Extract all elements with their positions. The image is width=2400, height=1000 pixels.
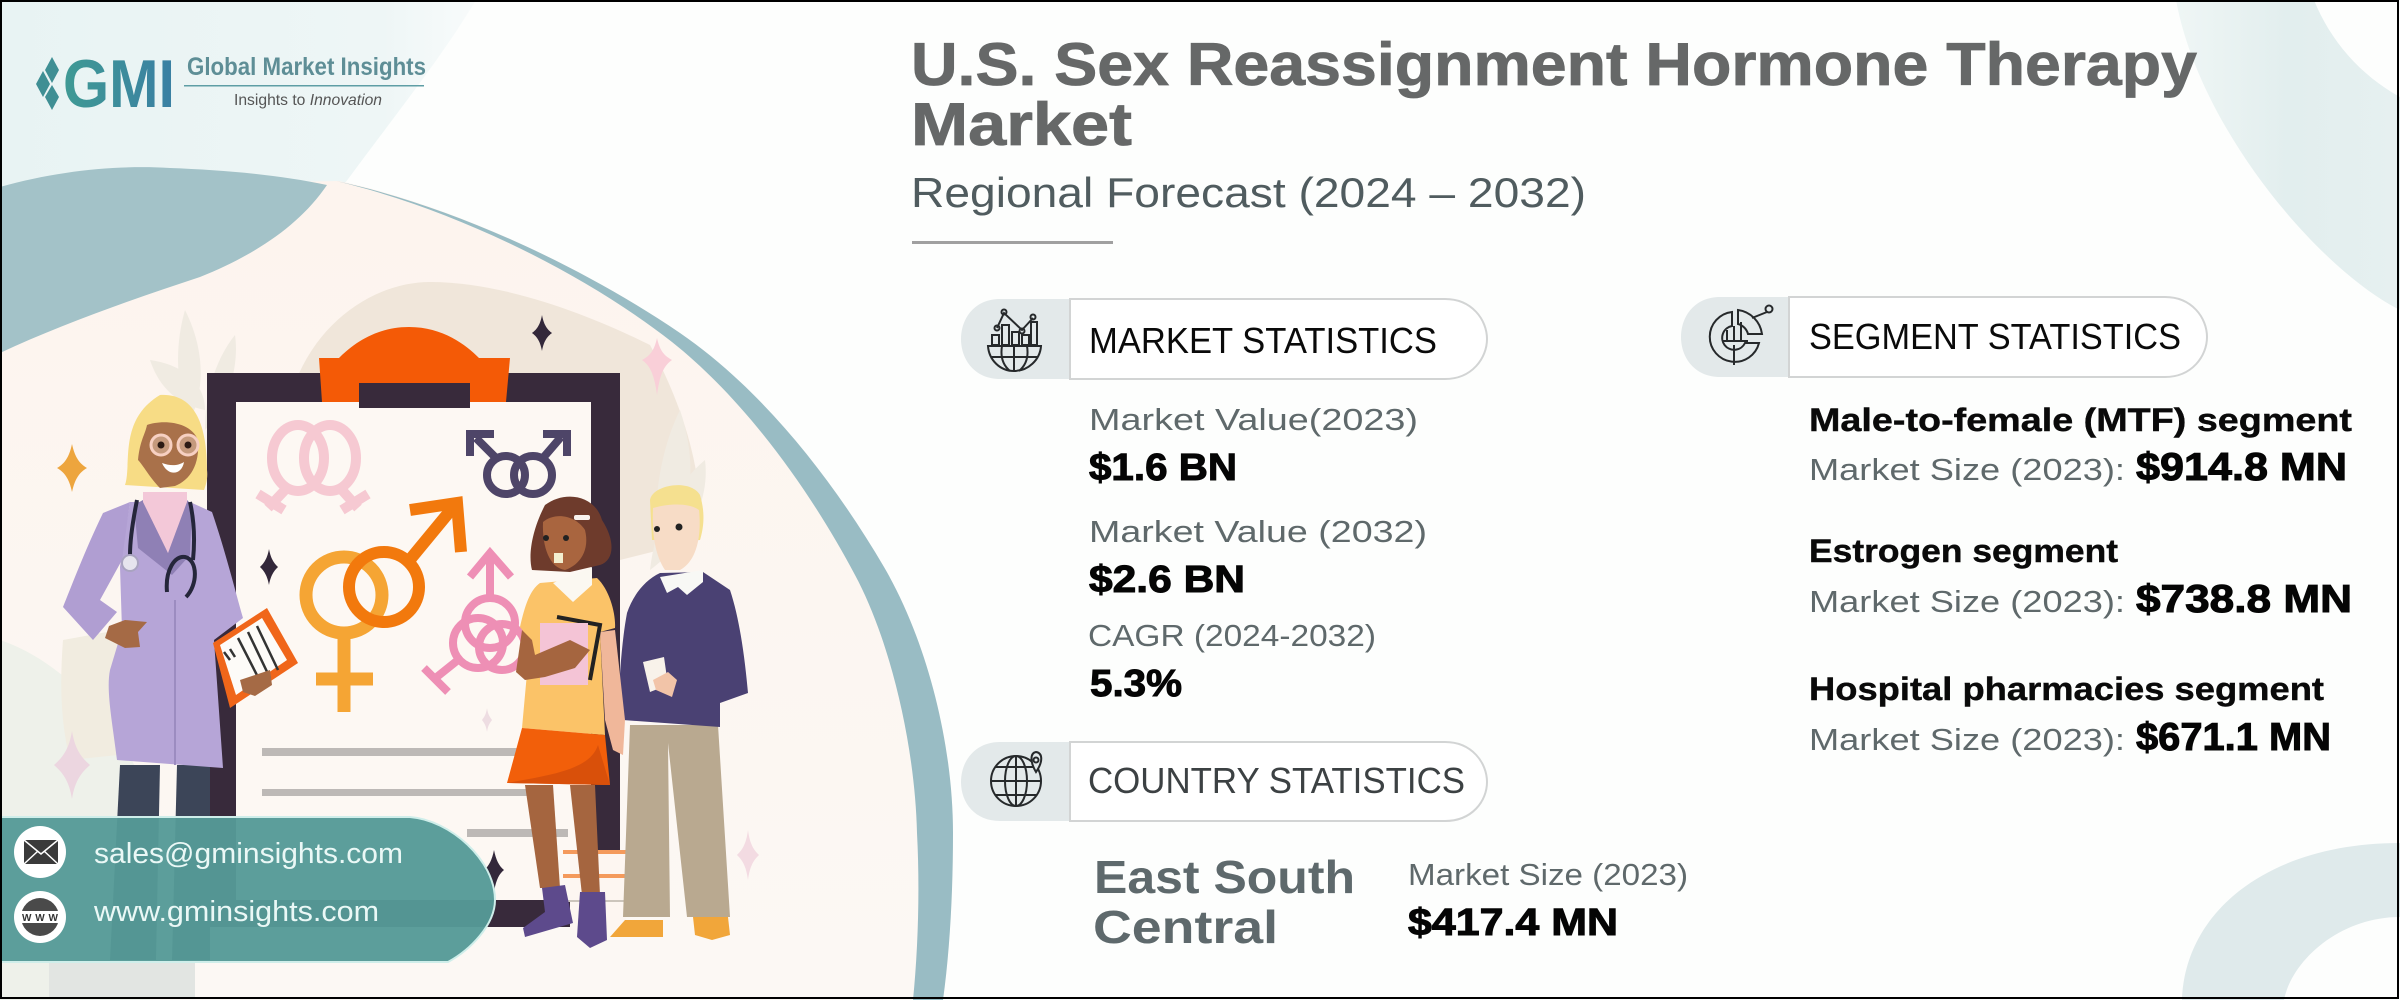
panel: market statistics header <box>961 299 1487 379</box>
CAGR <box>1088 618 1376 705</box>
country name: Central <box>1093 901 1278 953</box>
girl figure <box>507 497 625 948</box>
books <box>557 617 600 680</box>
arm <box>516 630 590 680</box>
face <box>543 516 586 570</box>
title: U.S. Sex Reassignment Hormone Therapy <box>911 31 2198 98</box>
bottom-right ring decoration <box>2182 843 2400 1000</box>
books stack <box>563 850 626 902</box>
legs <box>525 785 560 888</box>
logo tagline: Insights to Innovation <box>234 92 382 109</box>
subtitle: Regional Forecast (2024 – 2032) <box>911 169 1586 216</box>
sparkle small <box>482 708 492 732</box>
collar <box>553 567 592 602</box>
back arm <box>600 630 625 755</box>
email text: sales@gminsights.com <box>94 838 403 870</box>
segment: hospital pharmacies: Market Size (2023): <box>1809 722 2125 757</box>
top-right ring decoration <box>2176 0 2400 310</box>
logo letters: GMI <box>63 46 175 122</box>
trousers <box>623 725 730 917</box>
logo name: Global Market Insights <box>187 53 426 81</box>
lapel <box>134 500 192 575</box>
panel: segment statistics header <box>1681 297 2207 377</box>
clipboard <box>207 327 626 930</box>
icon: pink female symbols <box>258 425 368 510</box>
icon: pink transgender symbol <box>424 553 525 692</box>
icon: envelope <box>14 826 66 878</box>
coat shadow <box>61 630 118 760</box>
stethoscope <box>130 500 195 597</box>
segment: hospital pharmacies <box>1809 671 2331 759</box>
segment: male-to-female: Market Size (2023): <box>1809 452 2125 487</box>
segment: male-to-female: Male-to-female (MTF) segment <box>1809 402 2352 438</box>
country name <box>1093 851 1355 953</box>
lower-left pale shade <box>0 640 150 1000</box>
sparkle dark <box>532 315 552 351</box>
sweater <box>618 572 748 727</box>
icon: globe with pin <box>991 752 1041 806</box>
banner background <box>0 817 495 962</box>
website text: www.gminsights.com <box>93 896 379 928</box>
segment: hospital pharmacies: Hospital pharmacies segment <box>1809 671 2324 707</box>
logo <box>36 46 426 122</box>
shoes <box>610 920 663 937</box>
icon: orange female symbol <box>306 557 382 712</box>
segment: hospital pharmacies: $671.1 MN <box>2136 716 2331 759</box>
sparkle pale pink <box>737 830 759 880</box>
market value 2023 <box>1089 402 1418 489</box>
market value 2023: $1.6 BN <box>1089 447 1237 489</box>
sparkle pink <box>642 338 672 395</box>
icon: market chart globe <box>988 310 1041 371</box>
doctor figure <box>61 395 298 960</box>
icon: orange male symbol <box>349 503 461 622</box>
segment: estrogen: Market Size (2023): <box>1809 584 2125 619</box>
sparkle dark two <box>260 549 278 585</box>
title <box>911 31 2198 158</box>
coat body <box>109 502 243 768</box>
held clipboard <box>213 608 298 708</box>
sparkle pale lilac <box>54 731 90 799</box>
segment: male-to-female <box>1809 402 2352 489</box>
icon: purple male symbols <box>470 434 567 494</box>
icon: globe: WWW <box>22 913 59 924</box>
segment: estrogen: Estrogen segment <box>1809 533 2118 569</box>
country market size: Market Size (2023) <box>1408 857 1688 892</box>
segment: estrogen: $738.8 MN <box>2136 578 2352 621</box>
face <box>138 422 198 488</box>
hand <box>105 620 147 648</box>
shirt <box>520 578 615 735</box>
segment: male-to-female: $914.8 MN <box>2136 446 2347 489</box>
CAGR: 5.3% <box>1090 663 1182 705</box>
market value 2032 <box>1089 514 1427 601</box>
contact banner <box>0 817 495 962</box>
beige arch behind clipboard <box>285 282 701 560</box>
sparkle orange <box>57 444 87 492</box>
sparkle dark three <box>484 850 504 892</box>
hair <box>650 485 703 540</box>
patch under banner <box>49 963 195 997</box>
cup <box>643 657 668 692</box>
market value 2032: Market Value (2032) <box>1089 514 1427 549</box>
teal arc <box>336 181 953 1000</box>
top-left pale shape <box>0 0 476 200</box>
panel: country statistics header <box>961 742 1487 821</box>
heading: COUNTRY STATISTICS <box>1088 760 1465 801</box>
country market size <box>1408 857 1688 944</box>
segment: estrogen <box>1809 533 2352 621</box>
heading: MARKET STATISTICS <box>1089 320 1437 361</box>
skirt <box>507 728 610 785</box>
heading: SEGMENT STATISTICS <box>1809 316 2181 357</box>
leaves <box>150 310 706 570</box>
legs <box>110 765 160 960</box>
CAGR: CAGR (2024-2032) <box>1088 618 1376 653</box>
icon: segment donut chart <box>1710 306 1772 365</box>
title: Market <box>911 91 1132 158</box>
coat centre seam <box>174 600 176 765</box>
dark teal shape <box>0 167 327 353</box>
icon: globe <box>14 891 66 943</box>
face <box>653 504 700 570</box>
logo mark diamonds <box>36 57 59 110</box>
boy figure <box>610 485 748 940</box>
cream illustration circle <box>0 181 953 1000</box>
hair <box>531 497 612 572</box>
shoes <box>523 885 573 937</box>
market value 2023: Market Value(2023) <box>1089 402 1418 437</box>
sparkle icons <box>54 315 759 892</box>
pink turtleneck <box>143 492 187 553</box>
hand <box>653 672 677 697</box>
country market size: $417.4 MN <box>1408 902 1618 944</box>
country name: East South <box>1094 851 1355 903</box>
hair <box>125 395 207 490</box>
coat arm <box>63 502 130 640</box>
market value 2032: $2.6 BN <box>1089 559 1245 601</box>
collar <box>660 570 703 595</box>
